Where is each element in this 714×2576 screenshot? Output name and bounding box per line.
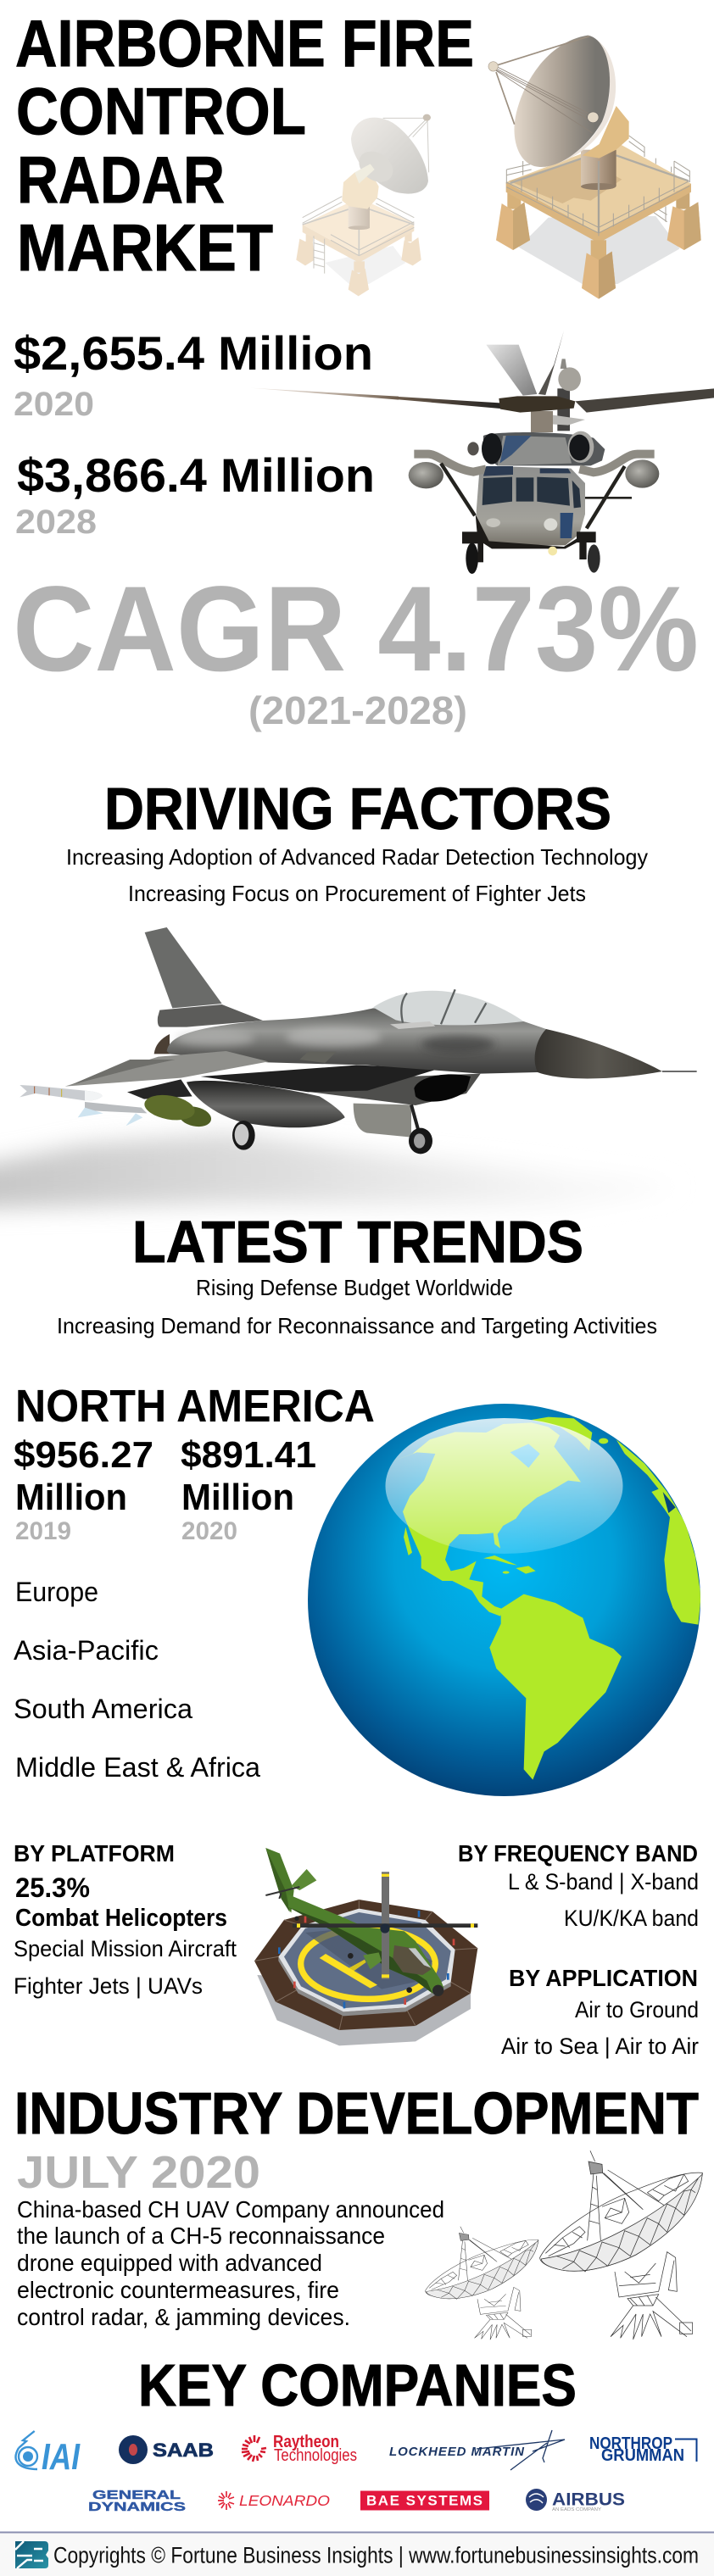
segment: by platform: BY PLATFORM (14, 1840, 175, 1867)
logo: Saab: SAAB (153, 2440, 214, 2461)
north america value 2020: 2020 (181, 1517, 237, 1545)
logo: Northrop Grumman (589, 2434, 697, 2465)
title: CONTROL (16, 74, 306, 148)
logo: Airbus (526, 2489, 625, 2512)
CAGR figure: (2021-2028) (248, 688, 467, 732)
development description: drone equipped with advanced (17, 2250, 322, 2276)
logo: Airbus: AN EADS COMPANY (552, 2507, 601, 2512)
heading: latest trends: LATEST TRENDS (132, 1209, 583, 1275)
north america value 2020: $891.41 (181, 1434, 316, 1476)
logo: Raytheon Technologies: Technologies (274, 2446, 357, 2465)
segment: by platform: Fighter Jets | UAVs (14, 1973, 203, 1999)
gloss highlight (385, 1418, 622, 1554)
title: AIRBORNE FIRE (15, 6, 474, 81)
logo: Leonardo (218, 2491, 330, 2510)
logo: Raytheon Technologies (242, 2433, 357, 2465)
segment: by application (501, 1965, 699, 2059)
segment: by frequency band (458, 1840, 699, 1931)
logo: Lockheed Martin (389, 2430, 565, 2470)
icon: wireframe satellite dishes (426, 2150, 702, 2340)
continents (388, 1417, 704, 1780)
logo: IAI: IAI (42, 2436, 81, 2478)
icon: globe (308, 1404, 704, 1796)
north america value 2020: Million (181, 1477, 294, 1518)
logo: Raytheon Technologies: Raytheon (273, 2433, 339, 2451)
logo: Northrop Grumman: GRUMMAN (601, 2446, 684, 2465)
small dish (426, 2227, 538, 2340)
development description: electronic countermeasures, fire (17, 2277, 339, 2303)
development description (17, 2196, 444, 2330)
icon: helicopter on helipad (254, 1848, 477, 2045)
title: MARKET (17, 210, 273, 285)
latest trends list (57, 1275, 657, 1338)
logo: Saab (119, 2435, 214, 2464)
segment: by platform: Combat Helicopters (15, 1905, 227, 1932)
segment: by frequency band: L & S-band | X-band (508, 1869, 699, 1894)
logo: IAI (16, 2431, 81, 2478)
market value 2020 (14, 326, 373, 423)
logo: Lockheed Martin: LOCKHEED MARTIN (389, 2445, 525, 2459)
north america value 2019: $956.27 (14, 1434, 153, 1476)
development description: the launch of a CH-5 reconnaissance (17, 2223, 385, 2249)
north america value 2019: Million (15, 1477, 127, 1518)
other regions: South America (14, 1694, 192, 1724)
north america value 2019 (14, 1434, 153, 1545)
development description: China-based CH UAV Company announced (17, 2196, 444, 2223)
driving factors list: Increasing Adoption of Advanced Radar Detection Technology (66, 844, 648, 870)
latest trends list: Rising Defense Budget Worldwide (196, 1275, 513, 1300)
other regions: Asia-Pacific (14, 1635, 159, 1666)
development description: control radar, & jamming devices. (17, 2304, 350, 2330)
segment: by application: Air to Sea | Air to Air (501, 2034, 699, 2059)
title: RADAR (17, 142, 225, 217)
heading: driving factors: DRIVING FACTORS (104, 776, 611, 842)
segment: by platform: 25.3% (15, 1872, 90, 1903)
market value 2028 (15, 448, 375, 541)
segment: by platform: Special Mission Aircraft (14, 1936, 237, 1961)
other regions: Middle East & Africa (15, 1752, 260, 1783)
icon: helicopter (250, 331, 714, 574)
other regions: Europe (15, 1577, 98, 1607)
icon: Fortune Business Insights logo (15, 2541, 48, 2568)
market value 2020: $2,655.4 Million (14, 326, 373, 380)
title (15, 6, 474, 285)
segment: by platform (14, 1840, 237, 1999)
latest trends list: Increasing Demand for Reconnaissance and Targeting Activities (57, 1313, 657, 1338)
logo: Leonardo: LEONARDO (239, 2492, 330, 2509)
date: july 2020: JULY 2020 (17, 2147, 260, 2198)
market value 2020: 2020 (14, 386, 94, 423)
north america heading: NORTH AMERICA (15, 1381, 375, 1432)
north america value 2019: 2019 (15, 1517, 71, 1545)
logo: General Dynamics: DYNAMICS (88, 2500, 186, 2514)
segment: by frequency band: BY FREQUENCY BAND (458, 1840, 698, 1867)
market value 2028: $3,866.4 Million (17, 448, 375, 502)
logo: BAE Systems: BAE SYSTEMS (366, 2492, 483, 2509)
heading: key companies: KEY COMPANIES (138, 2352, 577, 2418)
large dish (540, 2150, 702, 2340)
icon: large radar tower (488, 36, 701, 299)
logo: General Dynamics: GENERAL (92, 2488, 181, 2502)
market value 2028: 2028 (15, 504, 97, 541)
logo: General Dynamics (88, 2488, 186, 2514)
icon: fighter jet (0, 927, 697, 1210)
logo: Airbus: AIRBUS (552, 2490, 625, 2509)
logo: Northrop Grumman: NORTHROP (589, 2434, 672, 2453)
footer (0, 2531, 714, 2576)
segment: by application: Air to Ground (575, 1997, 699, 2022)
segment: by frequency band: KU/K/KA band (564, 1906, 699, 1931)
other regions (14, 1577, 260, 1783)
icon: faded radar tower (296, 114, 431, 296)
driving factors list: Increasing Focus on Procurement of Fighter Jets (128, 881, 586, 906)
segment: by application: BY APPLICATION (509, 1965, 698, 1991)
north america value 2020 (181, 1434, 316, 1545)
driving factors list (66, 844, 648, 906)
